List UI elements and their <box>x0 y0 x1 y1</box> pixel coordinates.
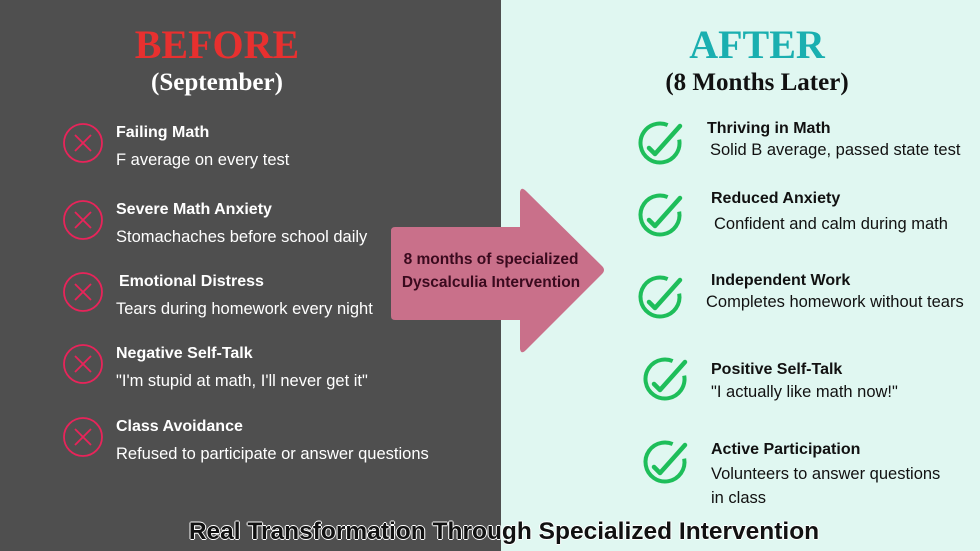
panel: after list <box>638 120 964 507</box>
item: emotional distress: Emotional Distress <box>119 273 264 290</box>
subheading: 8 months later: (8 Months Later) <box>665 69 849 96</box>
arrow label: 8 months of specialized <box>404 251 578 268</box>
arrow label <box>402 251 580 291</box>
item: class avoidance: Refused to participate or answer questions <box>116 445 429 463</box>
caption: Real Transformation Through Specialized Intervention <box>189 518 819 545</box>
heading: before: BEFORE <box>135 22 299 67</box>
item: negative self-talk: "I'm stupid at math, I'll never get it" <box>116 372 368 390</box>
item: active participation <box>643 440 940 507</box>
item: failing math <box>63 123 290 169</box>
item: severe math anxiety: Stomachaches before school daily <box>116 228 367 246</box>
item: active participation: in class <box>711 489 766 507</box>
item: severe math anxiety <box>63 200 368 246</box>
item: positive self-talk: "I actually like math now!" <box>711 383 898 401</box>
item: active participation: Volunteers to answer questions <box>711 465 940 483</box>
item: active participation: Active Participation <box>711 441 860 458</box>
arrow: intervention <box>391 188 604 352</box>
heading: after: AFTER <box>689 22 825 67</box>
item: reduced anxiety: Confident and calm during math <box>714 215 948 233</box>
item: thriving in math: Thriving in Math <box>707 120 831 137</box>
item: reduced anxiety: Reduced Anxiety <box>711 190 840 207</box>
arrow label: Dyscalculia Intervention <box>402 274 580 291</box>
panel: before list <box>63 123 429 463</box>
item: positive self-talk <box>643 358 898 401</box>
item: negative self-talk <box>63 344 368 390</box>
item: emotional distress: Tears during homework every night <box>116 300 373 318</box>
item: independent work: Independent Work <box>711 272 850 289</box>
item: thriving in math: Solid B average, passed state test <box>710 141 960 159</box>
item: independent work: Completes homework without tears <box>706 293 964 311</box>
item: thriving in math <box>638 120 960 164</box>
item: emotional distress <box>63 272 373 318</box>
item: negative self-talk: Negative Self-Talk <box>116 345 253 362</box>
item: reduced anxiety <box>638 190 948 236</box>
item: class avoidance <box>63 417 429 463</box>
item: failing math: Failing Math <box>116 124 209 141</box>
subheading: september: (September) <box>151 69 283 96</box>
item: class avoidance: Class Avoidance <box>116 418 243 435</box>
item: independent work <box>638 272 964 318</box>
item: positive self-talk: Positive Self-Talk <box>711 361 842 378</box>
item: failing math: F average on every test <box>116 151 289 169</box>
item: severe math anxiety: Severe Math Anxiety <box>116 201 272 218</box>
